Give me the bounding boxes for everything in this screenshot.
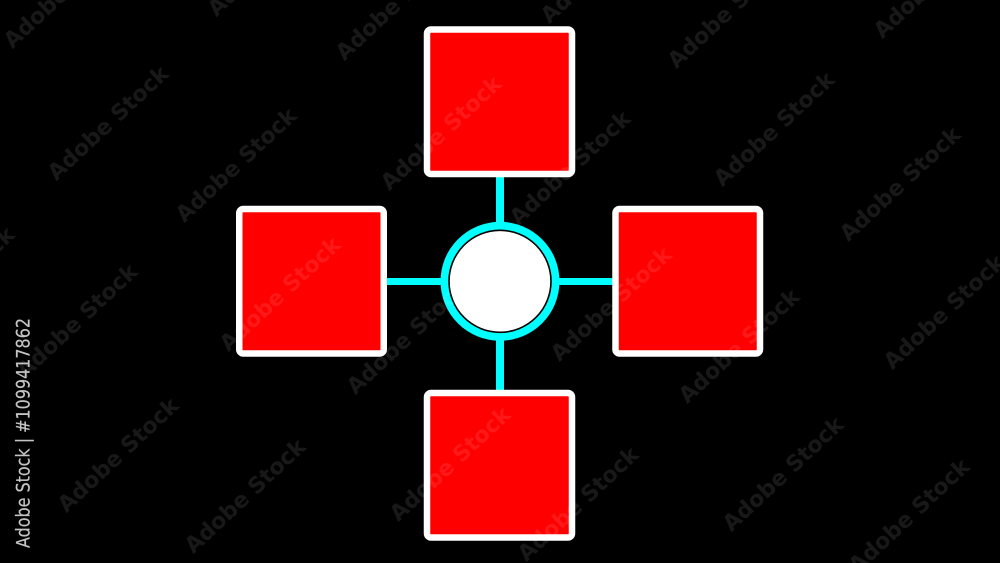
- watermark pattern: Adobe Stock: [546, 242, 678, 367]
- connector: bottom: [496, 334, 504, 396]
- stock id label: Adobe Stock | #1099417862: [14, 318, 34, 548]
- watermark pattern: Adobe Stock: [505, 106, 637, 231]
- panel: bottom red square: [427, 393, 572, 538]
- watermark pattern: Adobe Stock: [12, 259, 144, 384]
- panel: right red square: [616, 209, 760, 354]
- watermark pattern: Adobe Stock: [674, 284, 806, 409]
- watermark pattern: Adobe Stock: [385, 402, 517, 527]
- central hub circle: [440, 222, 560, 341]
- connector: left: [380, 278, 448, 285]
- connector: right: [552, 278, 618, 285]
- watermark pattern: Adobe Stock: [709, 67, 841, 192]
- watermark pattern: Adobe Stock: [53, 393, 185, 518]
- watermark pattern: Adobe Stock: [215, 232, 347, 357]
- watermark pattern: Adobe Stock: [376, 71, 508, 196]
- watermark pattern: Adobe Stock: [180, 434, 312, 559]
- connector: top: [496, 170, 504, 230]
- watermark pattern: Adobe Stock: [835, 122, 967, 247]
- watermark pattern: Adobe Stock: [718, 412, 850, 537]
- watermark pattern: Adobe Stock: [43, 61, 175, 186]
- watermark pattern: Adobe Stock: [342, 275, 474, 400]
- panel: top red square: [427, 30, 572, 174]
- watermark pattern: Adobe Stock: [171, 103, 303, 228]
- panel: left red square: [239, 209, 384, 354]
